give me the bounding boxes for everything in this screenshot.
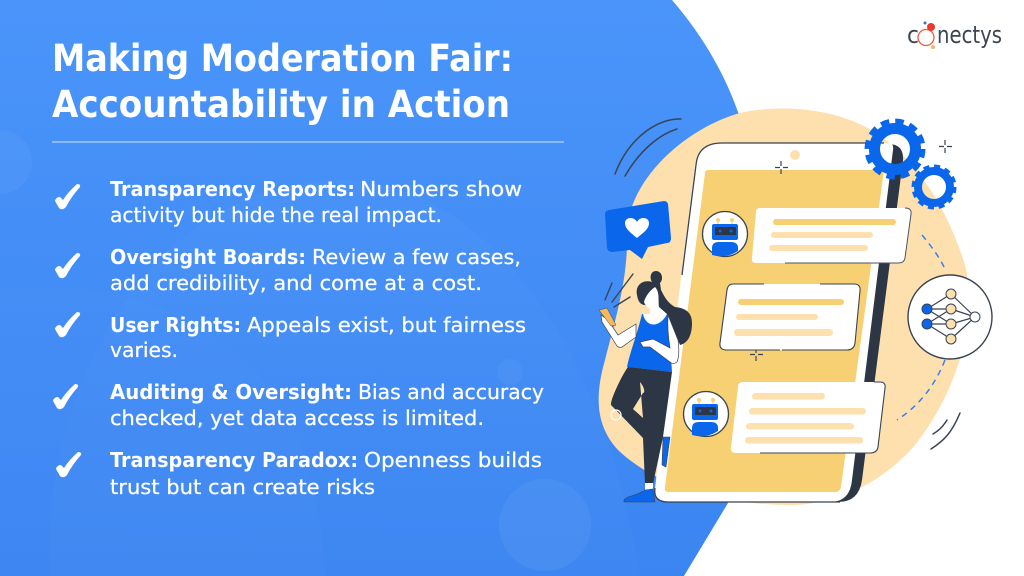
camera dot — [790, 150, 800, 160]
robot avatar 2 — [684, 392, 728, 436]
chat card 1 — [752, 208, 911, 263]
face and neck — [643, 287, 667, 324]
list item: Transparency Reports: Transparency Reports: — [110, 177, 355, 201]
legs — [611, 367, 672, 484]
list item: Transparency Paradox — [56, 448, 542, 499]
list item: User Rights: varies. — [110, 338, 178, 362]
list item: Transparency Paradox: Transparency Paradox: — [110, 448, 358, 472]
list item: Transparency Paradox: Openness builds — [364, 448, 542, 472]
blue background panel — [0, 0, 760, 576]
robot avatar 1 — [702, 212, 748, 256]
chat card 2 — [720, 284, 860, 350]
signal lines — [605, 274, 633, 307]
icon: check mark — [55, 312, 80, 337]
icon: check mark — [53, 384, 78, 409]
list item: Transparency Reports — [55, 177, 522, 227]
back foot — [662, 437, 670, 467]
icon: neural network — [908, 275, 992, 359]
folded arm — [640, 315, 679, 364]
sparkle — [750, 140, 952, 361]
logo: conectys — [907, 21, 1002, 49]
list item: Oversight Boards — [55, 245, 521, 295]
list item: Auditing and Oversight: Auditing & Oversight: — [110, 380, 352, 404]
icon: check mark — [56, 452, 81, 477]
dashed connector arcs — [922, 235, 946, 271]
sock — [645, 483, 653, 491]
blue top — [627, 314, 672, 372]
icon: check mark — [55, 184, 80, 209]
icon: large gear — [868, 122, 922, 176]
logo: conectys: nectys — [937, 21, 1002, 49]
list item: Auditing and Oversight: Bias and accuracy — [358, 380, 544, 404]
woman holding phone — [599, 271, 692, 502]
icon: small gear — [914, 166, 954, 208]
list item: User Rights: Appeals exist, but fairness — [247, 313, 526, 337]
illustration: phone with chatbots — [599, 109, 992, 505]
phone screen — [665, 170, 884, 492]
list item: Oversight Boards: Oversight Boards: — [110, 245, 306, 269]
title: Making Moderation Fair: — [52, 37, 513, 80]
list item: Auditing and Oversight — [53, 380, 544, 430]
icon: check mark — [55, 253, 80, 278]
phone in hand — [599, 308, 616, 326]
list item: Transparency Paradox: trust but can create risks — [110, 475, 375, 499]
title: Accountability in Action — [52, 83, 510, 126]
title — [52, 37, 513, 126]
logo: conectys: c — [907, 21, 919, 49]
list item: Transparency Reports: Numbers show — [360, 177, 522, 201]
beige blob — [599, 109, 969, 505]
icon: heart speech bubble — [605, 201, 671, 259]
list item: User Rights: User Rights: — [110, 313, 241, 337]
knee highlight — [611, 410, 621, 420]
hair — [637, 271, 692, 345]
list item: Transparency Reports: activity but hide the real impact. — [110, 203, 442, 227]
motion arcs — [615, 119, 681, 176]
gap between legs — [633, 382, 644, 418]
raised arm — [601, 315, 636, 347]
phone back — [780, 144, 903, 502]
list item: Oversight Boards: add credibility, and come at a cost. — [110, 271, 482, 295]
chat card 3 — [731, 382, 885, 453]
phone body — [655, 143, 893, 502]
list item: User Rights — [55, 312, 526, 362]
list item: Oversight Boards: Review a few cases, — [312, 245, 521, 269]
shoe — [624, 489, 655, 502]
list item: Auditing and Oversight: checked, yet data access is limited. — [110, 406, 484, 430]
